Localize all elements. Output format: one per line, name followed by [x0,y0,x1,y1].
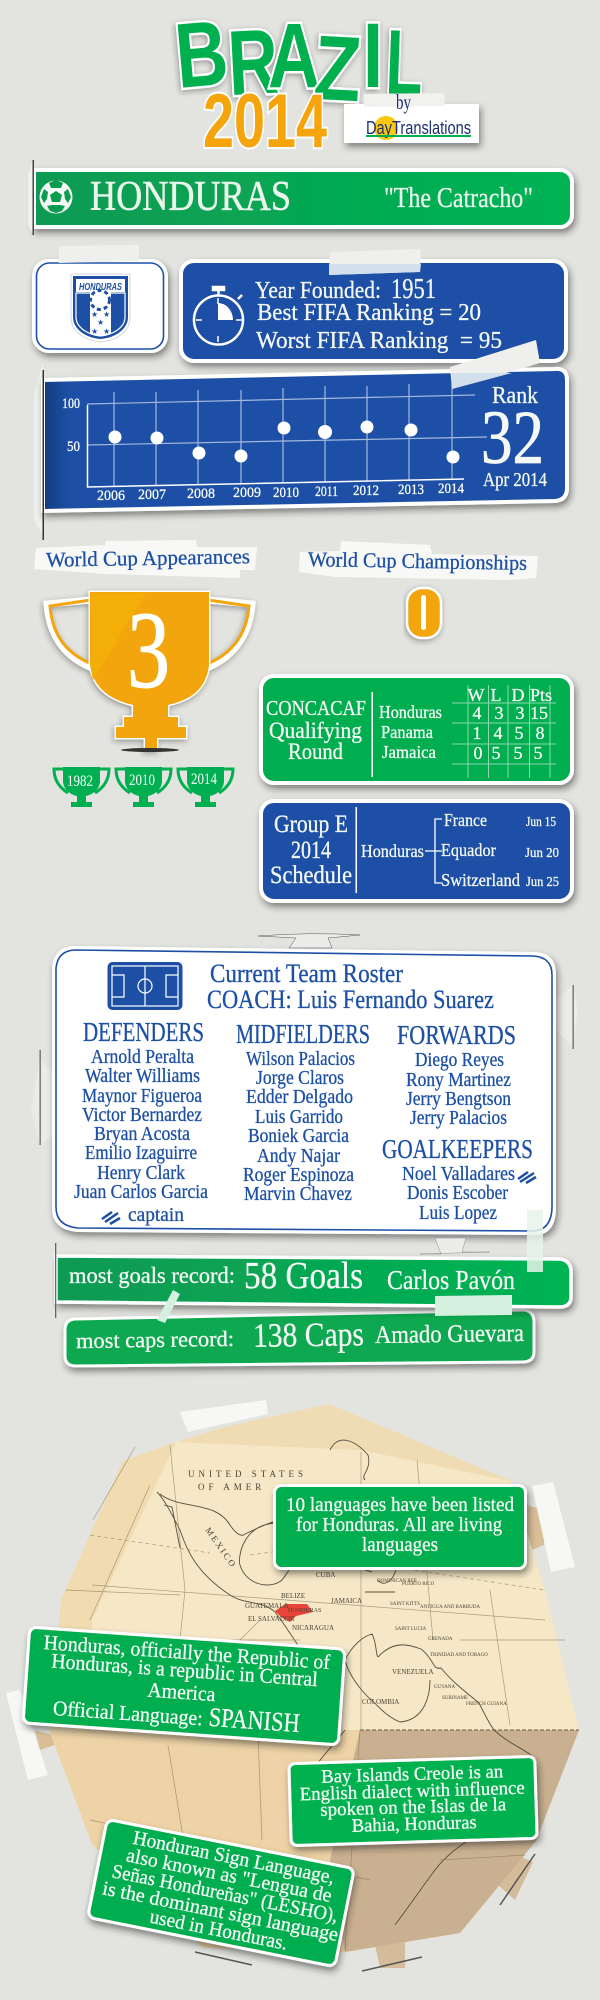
map labels: ANTIGUA AND BARBUDA [420,1605,480,1610]
text: rank label: Rank [492,383,538,409]
table: qualifying standings: 4 [494,723,502,743]
chart: ranking over years: 2011 [315,484,338,500]
map outlines [157,1440,536,1925]
callout: republic of Honduras: SPANISH [208,1702,301,1738]
panel: crest [32,245,168,353]
title: 2014: 2014 [203,79,327,164]
bracket: fixtures [361,810,559,890]
map labels: NICARAGUA [292,1624,334,1632]
heading: World Cup Championships: World Cup Championships [308,547,527,575]
heading: roster title: Current Team Roster [210,959,403,988]
banner: most goals record: 58 Goals [244,1255,363,1297]
tape: map right [532,1482,575,1572]
map labels: VENEZUELA [392,1668,434,1676]
chart: ranking over years: 2013 [398,482,424,498]
table: qualifying standings: Jamaica [382,742,436,762]
panel: CONCACAF qualifying [261,676,572,783]
icon: Honduras crest: HONDURAS [79,282,122,293]
text: count 3: 3 [127,589,170,711]
callout: Bay Islands Creole: spoken on the Islas de la [320,1794,507,1821]
list: goalkeepers: GOALKEEPERS [382,1134,533,1164]
map labels: SURINAME [442,1696,468,1701]
icon: Honduras crest: ★ [97,318,104,327]
chart: ranking over years: 2014 [438,481,464,497]
text: group title: 2014 [291,837,331,864]
map labels: DOMINICAN REP [377,1579,417,1584]
bracket: fixtures: Equador [441,840,496,860]
list: midfielders: Luis Garrido [255,1107,343,1128]
list: midfielders: MIDFIELDERS [236,1019,370,1049]
callout: Honduran Sign Language: also known as "Lengua de [124,1844,334,1907]
callout: republic of Honduras: Honduras, is a republic in Central [51,1649,319,1691]
callout: republic of Honduras: Honduras, officially the Republic of [43,1630,331,1674]
text: rank date: Apr 2014 [483,469,547,491]
callout: Bay Islands Creole: Bay Islands Creole is an [321,1761,504,1788]
callout: Honduran Sign Language: Señas Hondureñas" (LESHO), [110,1860,340,1927]
logo card: Day Translations: by [396,90,411,114]
callout: republic of Honduras [23,1627,345,1745]
table: qualifying standings: 1 [472,723,482,743]
bracket: fixtures: Honduras [361,841,424,861]
list: defenders [74,1017,208,1226]
list: goalkeepers [382,1134,536,1224]
list: midfielders: Edder Delgado [246,1087,353,1108]
tape: name strip [435,1295,512,1316]
list: forwards: FORWARDS [397,1020,516,1050]
nickname: "The Catracho" [384,182,533,214]
chart: ranking over years: 2010 [273,485,299,501]
callout: Bay Islands Creole: Bahia, Honduras [351,1812,477,1837]
text: round title [266,696,366,764]
banner: most caps record: most caps record: [76,1326,234,1353]
icon: soccer ball [40,180,72,214]
table: qualifying standings: 15 [530,703,548,723]
list: forwards: Rony Martinez [406,1070,511,1091]
icon: trophy 2014 [178,767,233,807]
list: defenders: Walter Williams [85,1066,200,1087]
map labels: EL SALVADOR [248,1615,295,1623]
callout: Honduran Sign Language: Honduran Sign Language, [131,1827,336,1889]
icon: Honduras crest: ★ [91,327,98,336]
icon: Honduras crest: ★ [103,310,110,319]
list: defenders: Bryan Acosta [94,1124,190,1145]
title: Brazil: L [384,12,425,115]
callout: languages count: 10 languages have been listed [286,1494,514,1516]
title: Brazil: I [363,5,383,107]
list: defenders: DEFENDERS [83,1017,204,1047]
panel: team roster [31,946,578,1235]
callout: Bay Islands Creole [289,1756,537,1846]
list: defenders: Juan Carlos Garcia [74,1182,208,1203]
bracket: fixtures: France [444,810,487,830]
map labels: COLOMBIA [362,1698,399,1706]
map labels: GUYANA [434,1685,456,1690]
text: round title: Round [288,739,343,764]
list: forwards: Jerry Palacios [410,1108,507,1129]
icon: zero championships [407,588,441,638]
map labels: OF AMER [198,1482,265,1492]
list: goalkeepers: Donis Escober [407,1183,508,1204]
map labels: JAMAICA [331,1597,362,1605]
map labels: SAINT KITTS [390,1602,420,1607]
heading: Honduras: HONDURAS [90,174,291,220]
tape: diagonal strip [157,1290,180,1323]
map labels: BELIZE [281,1592,305,1600]
list: midfielders: Andy Najar [257,1146,340,1167]
text: round title: Qualifying [269,718,362,743]
table: qualifying standings: 5 [492,743,500,763]
callout: republic of Honduras: Official Language: [52,1696,204,1730]
table: qualifying standings: 3 [494,703,504,723]
panel: ranking chart [34,340,567,540]
chart: ranking over years: 2009 [233,485,261,501]
callout: languages count: for Honduras. All are living [296,1514,502,1536]
icon: stopwatch [194,287,243,344]
text: group title [270,811,352,889]
callout: Honduran Sign Language [88,1819,354,1967]
list: goalkeepers: Noel Valladares [402,1164,515,1185]
Honduras highlight [275,1604,313,1622]
title: Brazil: Z [311,17,364,121]
logo card: Day Translations: DayTranslations [366,118,471,138]
text: rank 32: 32 [481,396,544,480]
list: midfielders: Jorge Claros [256,1068,344,1089]
list: midfielders: Boniek Garcia [248,1126,349,1147]
map labels: GRENADA [428,1637,453,1642]
list: midfielders [236,1019,370,1205]
icon: trophy 2010 [116,767,171,807]
banner: most goals record: most goals record: [69,1263,235,1288]
map labels: HONDURAS [288,1608,321,1614]
map labels: CUBA [316,1571,335,1579]
table: qualifying standings: 3 [516,703,524,723]
tape: roster top [258,934,360,948]
table: qualifying standings: L [490,685,502,705]
table: qualifying standings: W [468,685,484,705]
table: qualifying standings: 5 [514,723,524,743]
icon: big trophy [47,589,252,752]
map labels: FRENCH GUIANA [466,1702,507,1707]
map labels [188,1469,507,1707]
table: qualifying standings: 8 [536,723,544,743]
callout: Honduran Sign Language: used in Honduras. [148,1906,289,1955]
callout: Bay Islands Creole: English dialect with influence [299,1778,525,1805]
icon: Honduras crest: ★ [103,327,110,336]
table: qualifying standings: 0 [474,743,482,763]
list: forwards [397,1020,516,1129]
map labels: GUATEMALA [245,1602,289,1610]
tape: map left [6,1690,48,1780]
heading: World Cup Appearances: World Cup Appearances [46,544,250,572]
bracket: fixtures: Switzerland [441,870,520,890]
heading: roster title: COACH: Luis Fernando Suarez [207,985,494,1014]
icon: trophy 2014: 2014 [191,771,217,788]
chart: ranking over years: 2012 [353,483,379,499]
logo card: Day Translations [344,90,479,143]
bracket: fixtures: Jun 20 [525,846,559,861]
tape: between roster and records [420,1238,490,1254]
list: midfielders: Wilson Palacios [246,1049,355,1070]
list: defenders: Maynor Figueroa [82,1086,202,1107]
bracket: fixtures: Jun 15 [526,815,556,830]
table: qualifying standings [379,685,556,778]
map labels: UNITED STATES [188,1469,307,1479]
table: qualifying standings: 5 [534,743,542,763]
callout: Honduran Sign Language: is the dominant sign language [100,1877,340,1946]
list: defenders: Emilio Izaguirre [85,1143,197,1164]
text: year founded: Year Founded: [255,278,381,304]
list: defenders: captain [128,1204,184,1226]
icon: trophy 1982: 1982 [67,773,93,790]
banner: most caps record: 138 Caps [253,1316,364,1355]
list: goalkeepers: Luis Lopez [419,1203,497,1224]
list: defenders: Arnold Peralta [91,1047,194,1068]
icon: Honduras crest: ★ [91,310,98,319]
banner: most caps record: Amado Guevara [375,1320,524,1349]
title: Brazil: B [171,2,232,108]
text: best ranking: Best FIFA Ranking = 20 [257,300,481,326]
banner: most goals record: Carlos Pavón [387,1265,515,1295]
text: worst ranking: Worst FIFA Ranking = 95 [256,328,502,354]
title: Brazil [171,2,425,121]
table: qualifying standings: 5 [514,743,522,763]
text: group title: Schedule [270,862,352,889]
table: qualifying standings: D [512,685,524,705]
chart: ranking over years: 100 [62,396,80,412]
chart: ranking over years: 2007 [138,487,166,503]
title: Brazil: R [226,11,281,115]
chart: ranking over years: 2008 [187,486,215,502]
map labels: TRINIDAD AND TOBAGO [430,1653,488,1658]
map globe [35,1400,579,1971]
heading: World Cup Championships [299,541,538,580]
chart: ranking over years: 2006 [97,488,125,504]
bracket: fixtures: Jun 25 [526,875,559,890]
icon: soccer pitch [108,962,182,1010]
table: qualifying standings: Panama [381,722,433,742]
banner: Honduras [28,160,572,235]
panel: founding and FIFA ranking: 1951 [391,274,436,305]
list: defenders: Henry Clark [97,1163,185,1184]
text: group title: Group E [274,811,348,838]
banner: most goals record [50,1243,571,1318]
icon: trophy 2010: 2010 [129,772,155,789]
chart: ranking over years: 50 [67,439,80,455]
list: midfielders: Roger Espinoza [243,1165,354,1186]
icon: Honduras crest [71,274,130,342]
map labels: PUERTO RICO [402,1582,435,1587]
banner: most caps record [65,1310,534,1366]
list: forwards: Diego Reyes [415,1050,504,1071]
callout: languages count [274,1486,526,1568]
tape: vertical record strip [527,1210,543,1272]
panel: founding and FIFA ranking [181,249,566,361]
callout: republic of Honduras: America [147,1678,217,1706]
map labels: SAINT LUCIA [395,1627,427,1632]
chart: ranking over years [62,384,487,504]
list: defenders: Victor Bernardez [82,1105,202,1126]
heading: roster title [207,959,494,1014]
icon: trophy 1982 [54,767,109,807]
title: Brazil: A [268,5,320,107]
heading: World Cup Appearances [34,540,257,578]
list: midfielders: Marvin Chavez [244,1184,352,1205]
panel: Group E schedule [261,801,572,901]
table: qualifying standings: Honduras [379,702,442,722]
text: round title: CONCACAF [266,696,366,720]
table: qualifying standings: Pts [530,685,552,705]
callout: languages count: languages [362,1534,438,1556]
list: forwards: Jerry Bengtson [406,1089,511,1110]
map labels: MEXICO [203,1525,239,1570]
table: qualifying standings: 4 [472,703,482,723]
tape: map flaps [35,1400,544,1971]
